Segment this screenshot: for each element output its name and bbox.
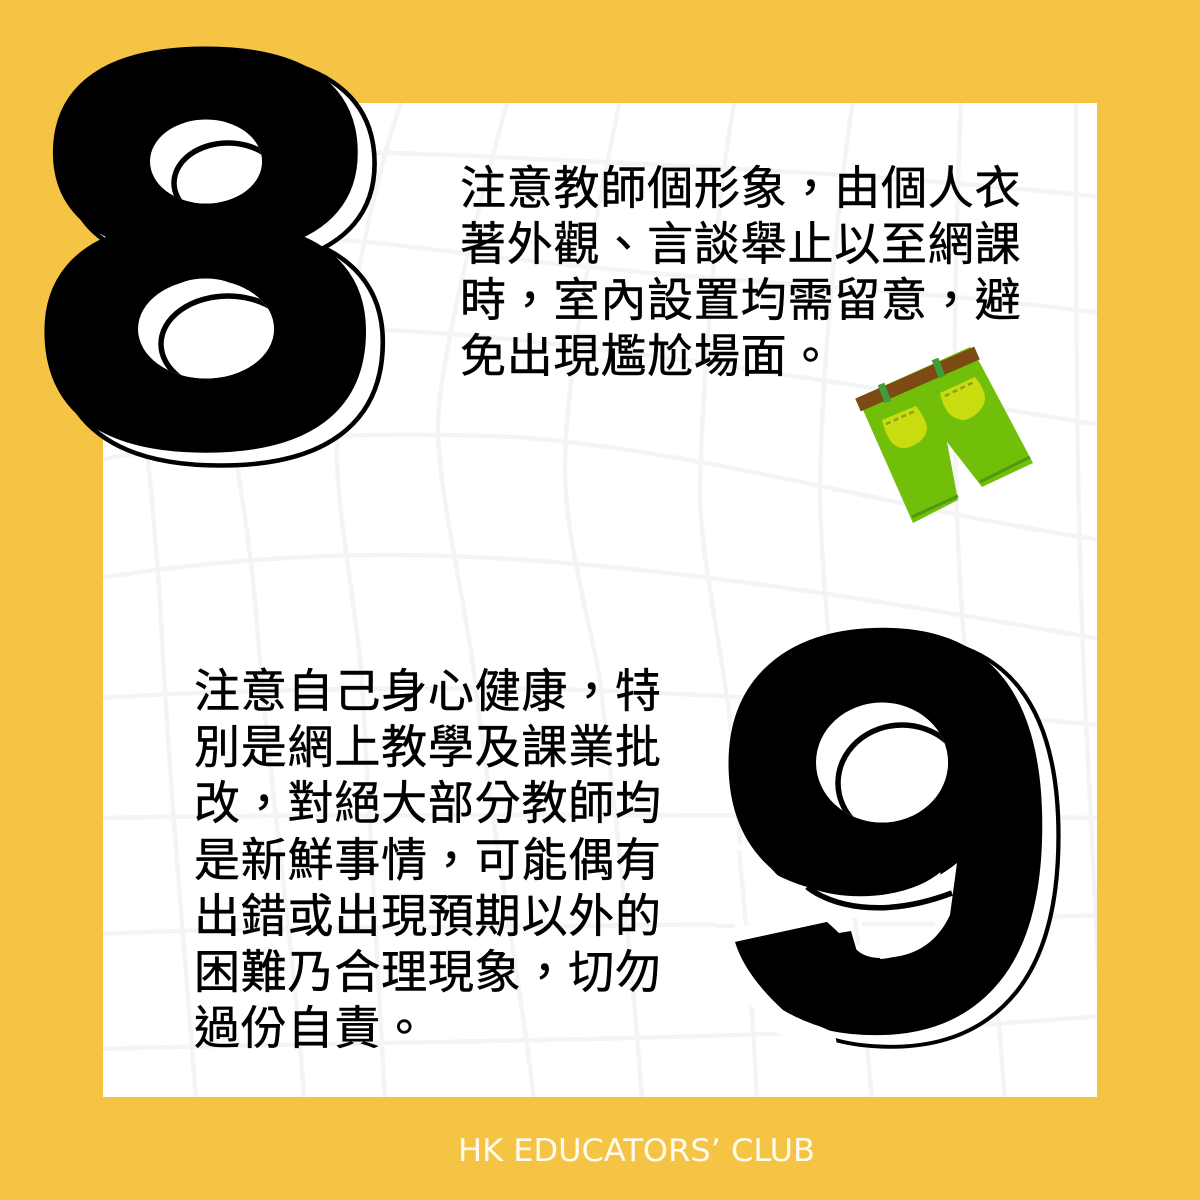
numeral 9: 9 xyxy=(732,533,1071,1150)
text block: tip 8 xyxy=(460,162,1021,382)
text block: tip 8: 著外觀、言談舉止以至網課 xyxy=(460,218,1021,270)
numeral 9: 9 xyxy=(716,522,1056,1139)
footer brand: HK EDUCATORS’ CLUB xyxy=(458,1133,815,1169)
numeral 9: 9 xyxy=(732,533,1071,1150)
text block: tip 9: 別是網上教學及課業批 xyxy=(194,721,662,773)
text block: tip 9: 過份自責。 xyxy=(194,1002,428,1054)
text block: tip 9: 是新鮮事情，可能偶有 xyxy=(194,834,662,886)
text block: tip 9: 注意自己身心健康，特 xyxy=(194,665,662,717)
text block: tip 8: 免出現尷尬場面。 xyxy=(460,330,834,382)
text block: tip 9 xyxy=(194,665,662,1054)
white panel xyxy=(103,103,1097,1097)
text block: tip 8: 時，室內設置均需留意，避 xyxy=(460,274,1021,326)
text block: tip 9: 出錯或出現預期以外的 xyxy=(194,890,662,942)
text block: tip 8: 注意教師個形象，由個人衣 xyxy=(460,162,1021,214)
text block: tip 9: 困難乃合理現象，切勿 xyxy=(194,946,662,998)
icon: green shorts xyxy=(857,347,1033,523)
text block: tip 9: 改，對絕大部分教師均 xyxy=(194,777,662,829)
numeral 9 xyxy=(715,628,1061,1049)
